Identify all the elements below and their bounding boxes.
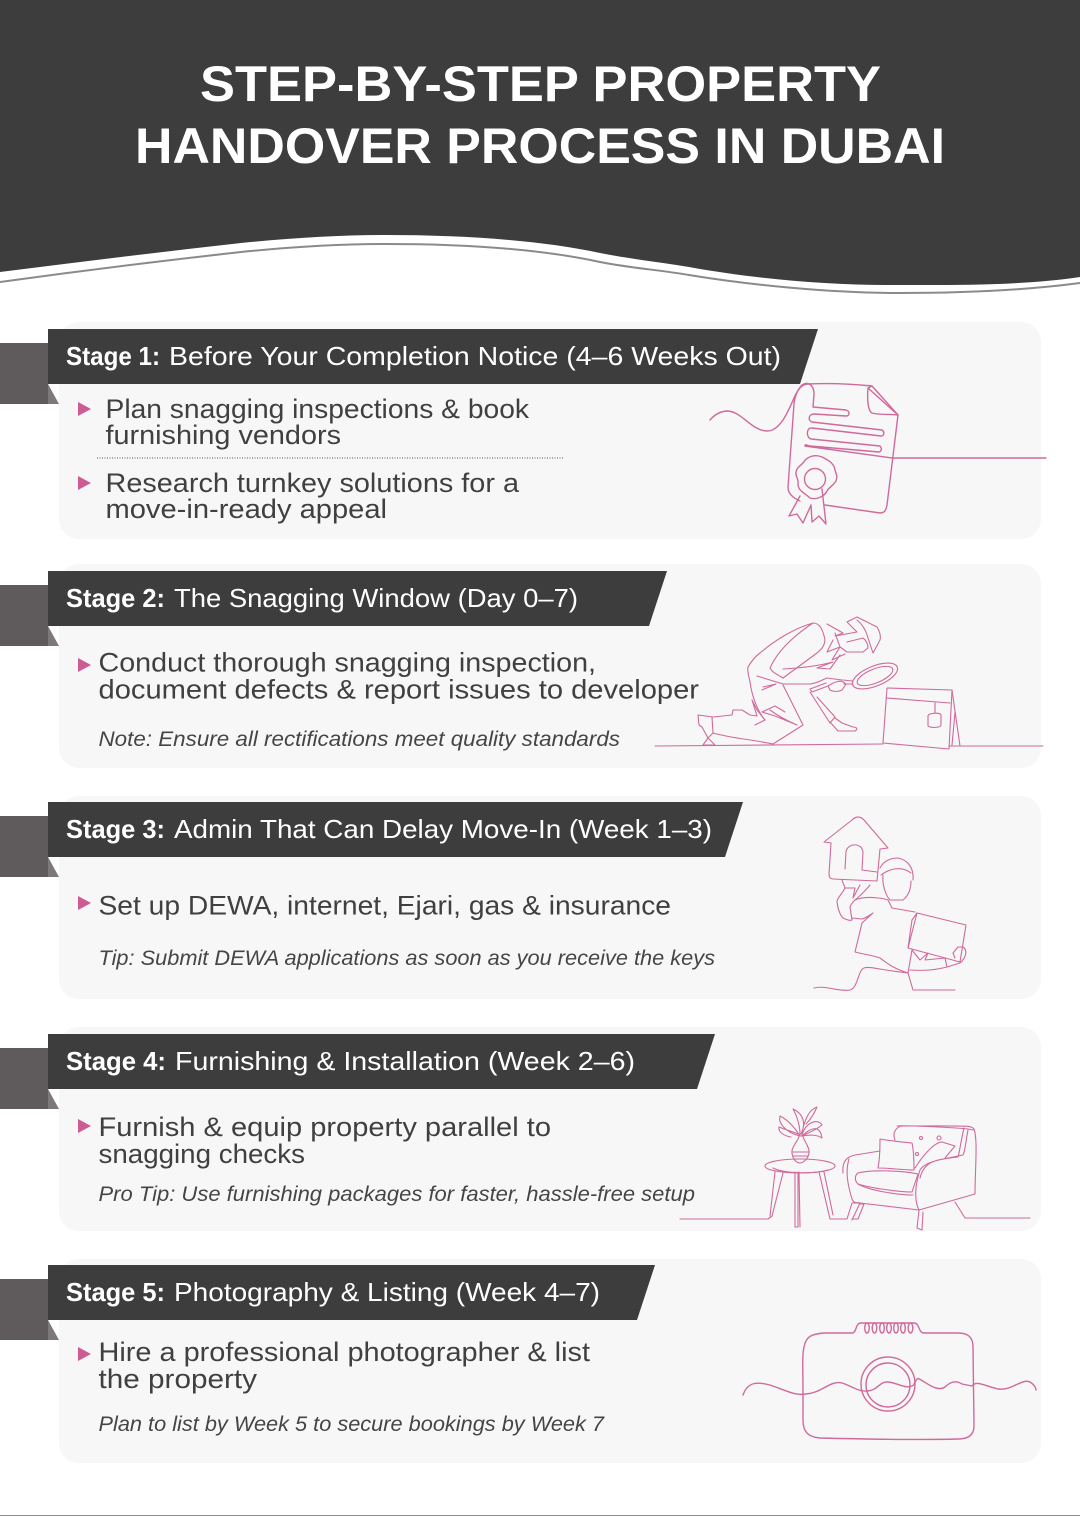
stage 1 heading: Stage 1: (66, 341, 160, 371)
panel: stage 4 (0, 1027, 1041, 1231)
bullet text (98, 1337, 591, 1394)
stage 5 heading: Photography & Listing (Week 4–7) (174, 1277, 600, 1307)
bullet text: Set up DEWA, internet, Ejari, gas & insurance (98, 890, 671, 920)
bullet text: move-in-ready appeal (106, 494, 387, 524)
stage 2 ribbon (0, 585, 59, 646)
stage 4 ribbon (0, 1048, 59, 1109)
stage 4 heading bar (48, 1034, 715, 1089)
panel: stage 5 (0, 1259, 1041, 1463)
stage 3 heading: Stage 3: (66, 814, 165, 844)
bullet text: Hire a professional photographer & list (98, 1337, 591, 1367)
icon: camera (743, 1323, 1036, 1439)
bullet text (106, 394, 530, 450)
stage 3 ribbon (0, 816, 59, 877)
stage 1 heading bar (48, 329, 818, 384)
bullet text: Research turnkey solutions for a (106, 468, 520, 498)
bullet text: the property (98, 1364, 258, 1394)
bullet text (98, 648, 699, 704)
stage 5 heading bar (48, 1265, 655, 1320)
bullet text: document defects & report issues to developer (98, 674, 699, 704)
bullet text: furnishing vendors (106, 420, 341, 450)
stage 2 heading: Stage 2: (66, 583, 165, 613)
bullet text: Plan snagging inspections & book (106, 394, 530, 424)
bottom rule (0, 1514, 1080, 1516)
stage 1 ribbon (0, 343, 59, 404)
stage 5 heading: Stage 5: (66, 1277, 165, 1307)
stage 1 card (59, 322, 1041, 539)
bullet text: Conduct thorough snagging inspection, (98, 648, 596, 678)
title: STEP-BY-STEP PROPERTY (200, 56, 881, 112)
panel: stage 2 (0, 564, 1043, 768)
bullet arrow (78, 896, 91, 910)
tip: Tip: Submit DEWA applications as soon as you receive the keys (98, 947, 716, 970)
bullet text: Furnish & equip property parallel to (98, 1112, 551, 1142)
stage 3 card (59, 796, 1041, 999)
bullet arrow (78, 1347, 91, 1361)
stage 4 heading: Furnishing & Installation (Week 2–6) (175, 1046, 635, 1076)
stage 2 heading: The Snagging Window (Day 0–7) (174, 583, 578, 613)
planning note: Plan to list by Week 5 to secure bookings by Week 7 (98, 1413, 605, 1436)
header banner (0, 0, 1080, 293)
bullet arrow (78, 476, 91, 490)
bullet text (98, 1112, 551, 1169)
stage 5 ribbon (0, 1279, 59, 1340)
bullet arrow (78, 402, 91, 416)
title (135, 56, 945, 174)
bullet arrow (78, 658, 91, 672)
stage 4 card (59, 1027, 1041, 1231)
icon: inspector with magnifying glass (655, 617, 1043, 749)
icon: person holding house key and laptop (814, 817, 966, 990)
stage 1 heading: Before Your Completion Notice (4–6 Weeks Out) (169, 341, 781, 371)
stage 3 heading: Admin That Can Delay Move-In (Week 1–3) (174, 814, 712, 844)
icon: certificate document (710, 383, 1046, 524)
panel: stage 3 (0, 796, 1041, 999)
bullet arrow (78, 1119, 91, 1133)
stage 5 card (59, 1259, 1041, 1463)
pro tip: Pro Tip: Use furnishing packages for faster, hassle-free setup (98, 1183, 695, 1206)
bullet text (106, 468, 520, 524)
stage 3 heading bar (48, 802, 743, 857)
bullet text: snagging checks (98, 1139, 305, 1169)
stage 2 card (59, 564, 1041, 768)
note: Note: Ensure all rectifications meet quality standards (98, 728, 621, 751)
stage 4 heading: Stage 4: (66, 1046, 166, 1076)
icon: armchair, side table and plant (680, 1107, 1030, 1230)
title: HANDOVER PROCESS IN DUBAI (135, 118, 945, 174)
stage 2 heading bar (48, 571, 667, 626)
panel: stage 1 (0, 322, 1046, 539)
